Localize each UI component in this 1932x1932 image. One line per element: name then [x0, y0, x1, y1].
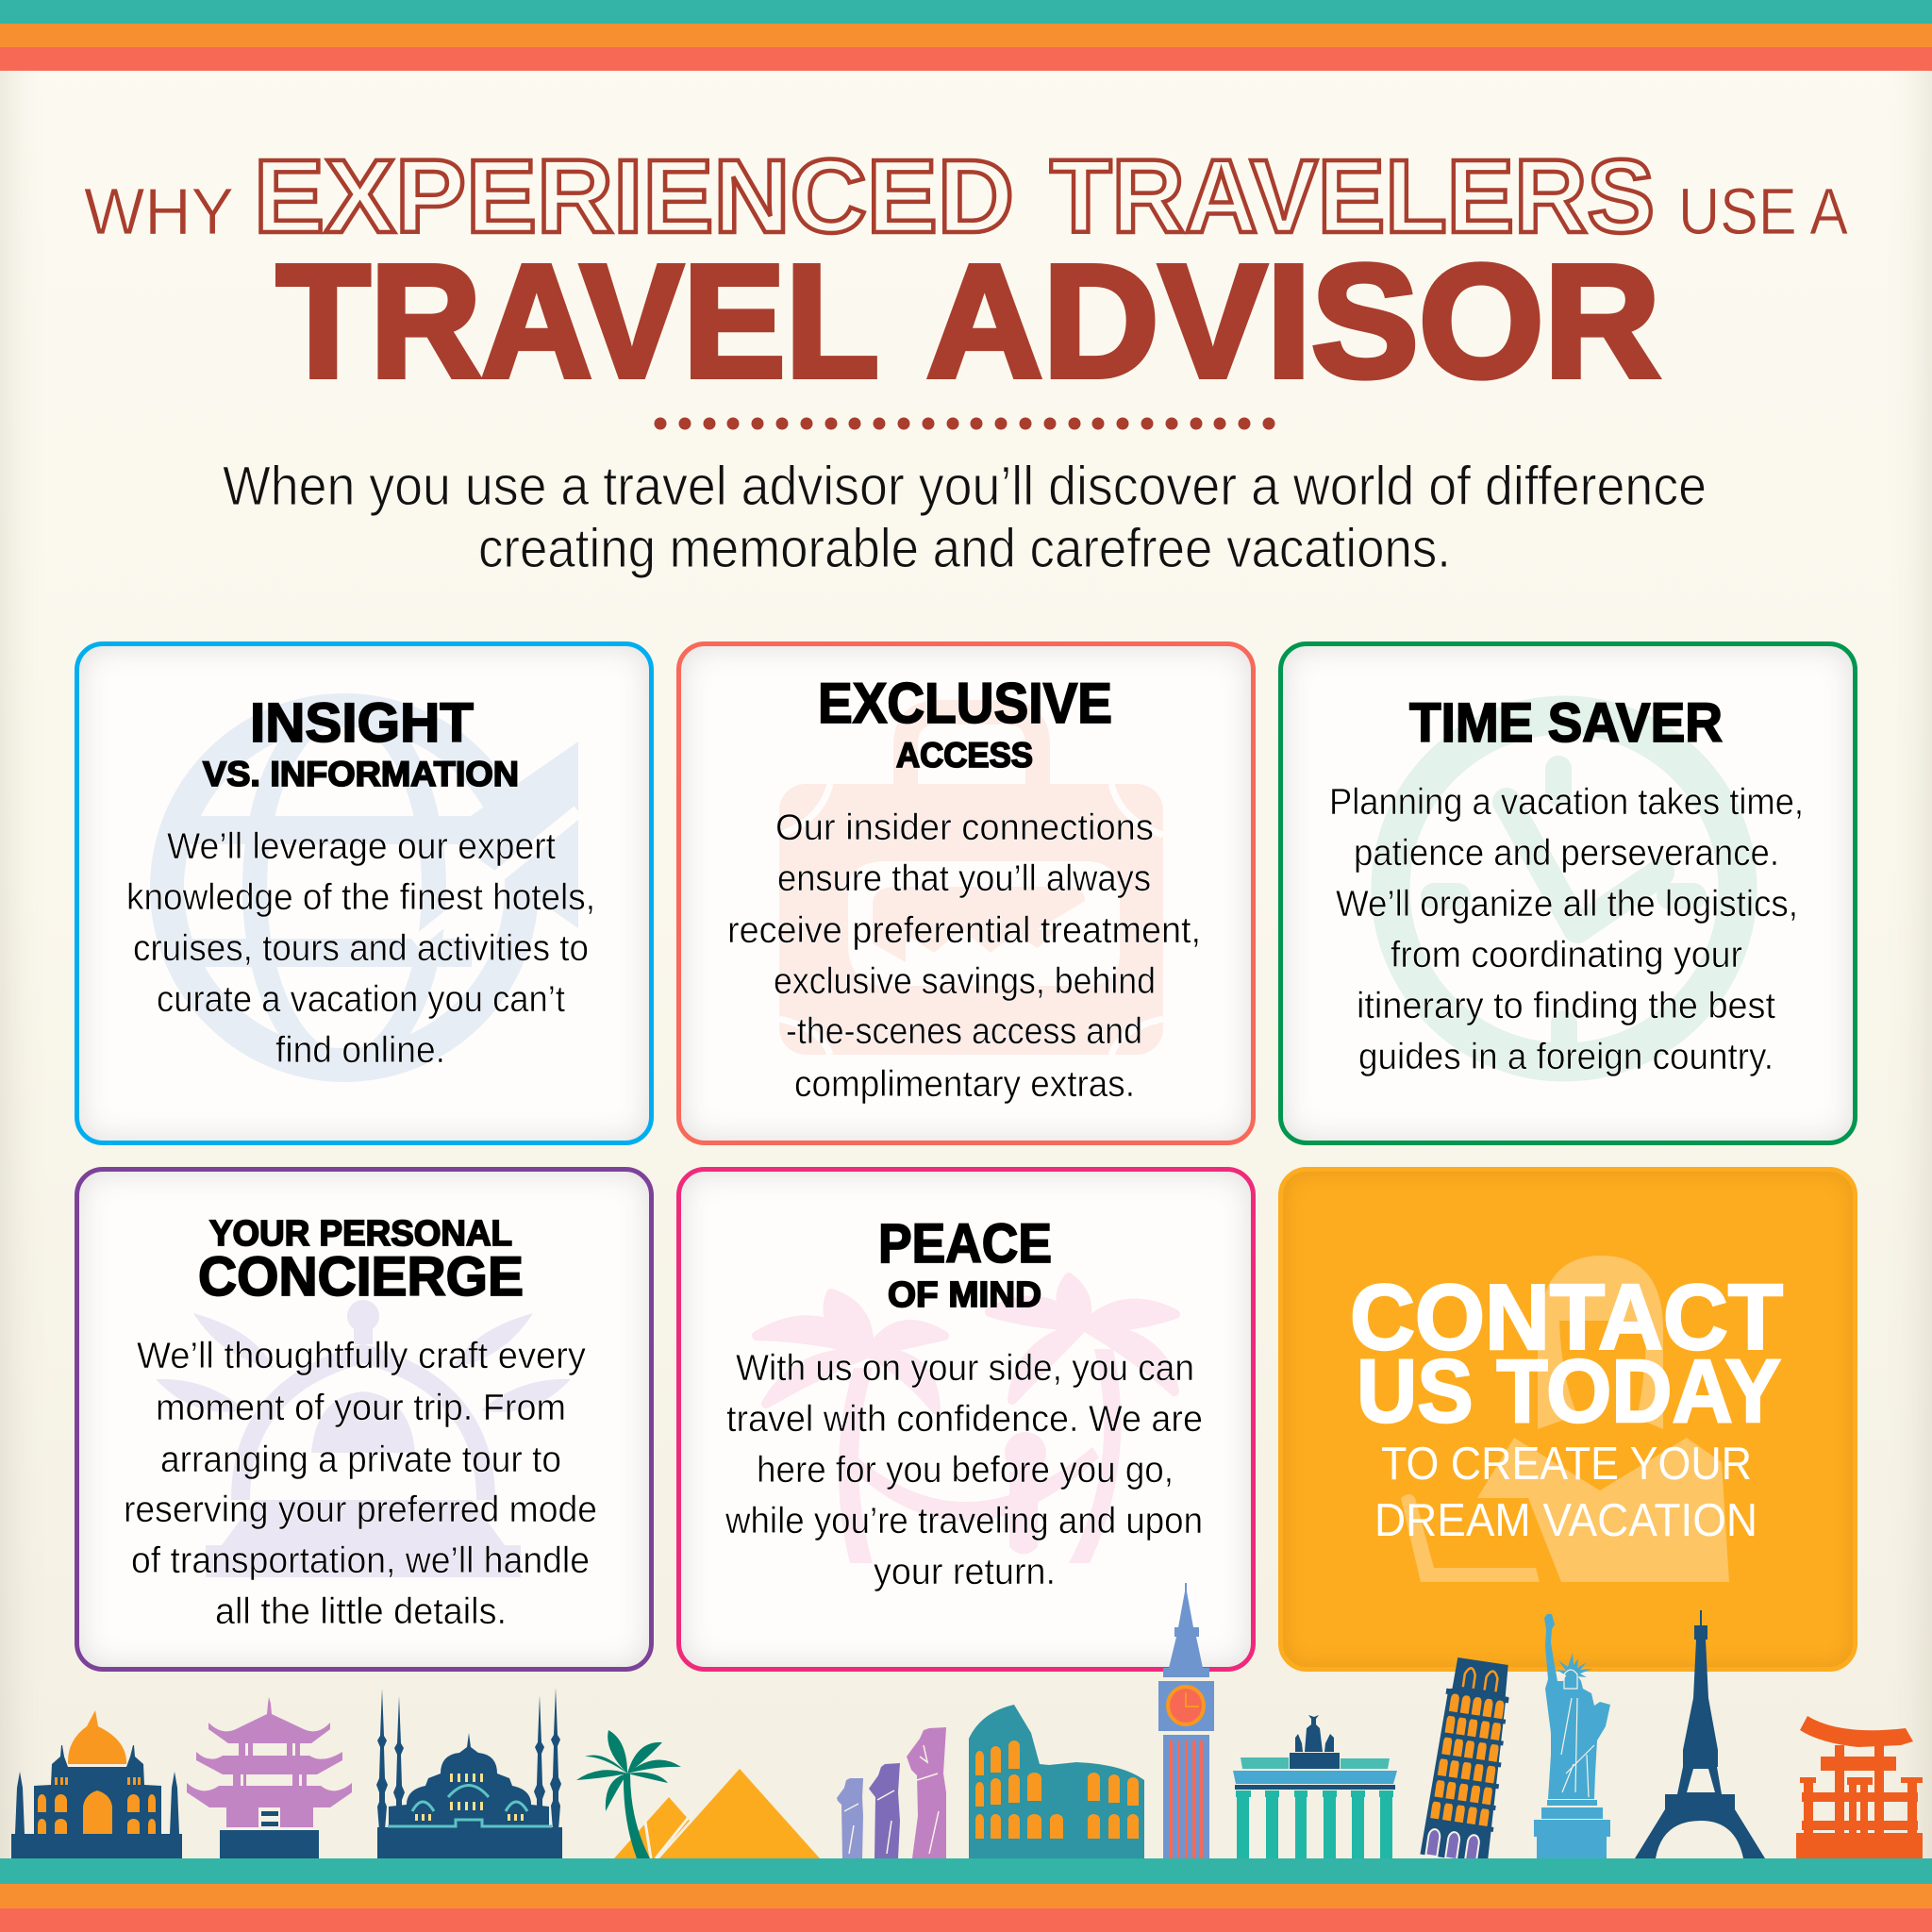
body text: -the-scenes access and [786, 1011, 1142, 1052]
heading: TIME SAVER [1409, 692, 1723, 754]
body text: all the little details. [215, 1591, 507, 1632]
body text: find online. [275, 1030, 445, 1071]
body text: curate a vacation you can’t [157, 979, 565, 1020]
intro text [223, 456, 1707, 579]
title: USE A [1678, 175, 1848, 248]
body text: itinerary to finding the best [1357, 986, 1775, 1026]
icon: suitcase [779, 712, 1163, 1055]
title: EXPERIENCED [254, 139, 1014, 255]
body text [727, 808, 1201, 1105]
body text: arranging a private tour to [160, 1440, 561, 1480]
heading: EXCLUSIVE [818, 672, 1112, 735]
body text: We’ll leverage our expert [167, 826, 556, 867]
body text: from coordinating your [1391, 935, 1742, 975]
heading: ACCESS [896, 736, 1033, 774]
title [84, 139, 1848, 411]
intro text: creating memorable and carefree vacations. [478, 518, 1451, 579]
call to action text: US TODAY [1357, 1341, 1781, 1441]
body text: here for you before you go, [757, 1450, 1174, 1491]
body text: ensure that you’ll always [777, 858, 1151, 899]
body text: knowledge of the finest hotels, [126, 877, 595, 918]
body text: patience and perseverance. [1354, 833, 1779, 874]
icon: palms and hammock [757, 1277, 1175, 1563]
title: WHY [84, 175, 234, 248]
icon: moai statues [837, 1727, 946, 1858]
body text: receive preferential treatment, [727, 910, 1201, 951]
body text: your return. [874, 1552, 1056, 1592]
heading: PEACE [878, 1213, 1052, 1274]
icon: torii gate [1796, 1716, 1923, 1858]
dotted divider [655, 417, 1275, 430]
panel: time saver [1278, 641, 1857, 1145]
body text [126, 826, 595, 1071]
body text [124, 1336, 597, 1632]
heading: INSIGHT [250, 692, 474, 754]
body text: of transportation, we’ll handle [131, 1541, 590, 1581]
body text: moment of your trip. From [156, 1388, 566, 1428]
call to action text: DREAM VACATION [1374, 1495, 1757, 1546]
body text: With us on your side, you can [736, 1348, 1194, 1389]
bottom stripes [0, 1858, 1932, 1932]
call to action text [1350, 1265, 1783, 1546]
icon: colosseum [969, 1705, 1144, 1858]
icon: eiffel tower [1635, 1610, 1765, 1858]
panel: personal concierge [75, 1167, 654, 1672]
panel: peace of mind [676, 1167, 1256, 1672]
body text: Planning a vacation takes time, [1329, 782, 1804, 823]
icon: taj mahal [11, 1710, 182, 1858]
panel: exclusive access [676, 641, 1256, 1145]
icon: leaning tower of pisa [1420, 1657, 1518, 1864]
body text: Our insider connections [775, 808, 1154, 848]
title: TRAVELERS [1050, 139, 1655, 255]
panel: insight vs information [75, 641, 654, 1145]
body text [724, 1348, 1203, 1592]
icon: concierge bell [156, 1300, 571, 1577]
heading [878, 1213, 1052, 1315]
top stripes [0, 0, 1932, 71]
icon: pyramids and palm tree [576, 1730, 820, 1858]
icon: big ben [1158, 1583, 1214, 1858]
heading: VS. INFORMATION [203, 755, 519, 793]
heading: CONCIERGE [198, 1246, 524, 1307]
heading: OF MIND [888, 1275, 1041, 1315]
body text: We’ll organize all the logistics, [1336, 884, 1798, 924]
icon: person at desk [1401, 1256, 1729, 1582]
icon: blue mosque [376, 1688, 562, 1858]
icon: brandenburg gate [1233, 1715, 1397, 1858]
icon: statue of liberty [1534, 1614, 1610, 1858]
icon: globe with arrow [167, 710, 578, 1065]
skyline illustration [11, 1583, 1923, 1858]
body text: while you’re traveling and upon [724, 1501, 1203, 1541]
body text: guides in a foreign country. [1358, 1037, 1774, 1077]
body text: complimentary extras. [794, 1064, 1135, 1105]
panel: contact us today [1278, 1167, 1857, 1672]
title: ADVISOR [926, 232, 1660, 411]
body text [1329, 782, 1804, 1077]
body text: reserving your preferred mode [124, 1490, 597, 1530]
call to action text: CONTACT [1350, 1265, 1783, 1369]
body text: exclusive savings, behind [774, 961, 1156, 1002]
intro text: When you use a travel advisor you’ll discover a world of difference [223, 456, 1707, 517]
icon: clock [1391, 715, 1738, 1062]
title: TRAVEL [276, 232, 879, 411]
body text: cruises, tours and activities to [133, 928, 589, 969]
heading [818, 672, 1112, 774]
icon: pagoda [187, 1697, 352, 1858]
heading [203, 692, 519, 793]
body text: We’ll thoughtfully craft every [137, 1336, 586, 1376]
heading [198, 1214, 524, 1307]
heading: YOUR PERSONAL [209, 1214, 512, 1254]
call to action text: TO CREATE YOUR [1381, 1439, 1752, 1490]
body text: travel with confidence. We are [726, 1399, 1203, 1440]
